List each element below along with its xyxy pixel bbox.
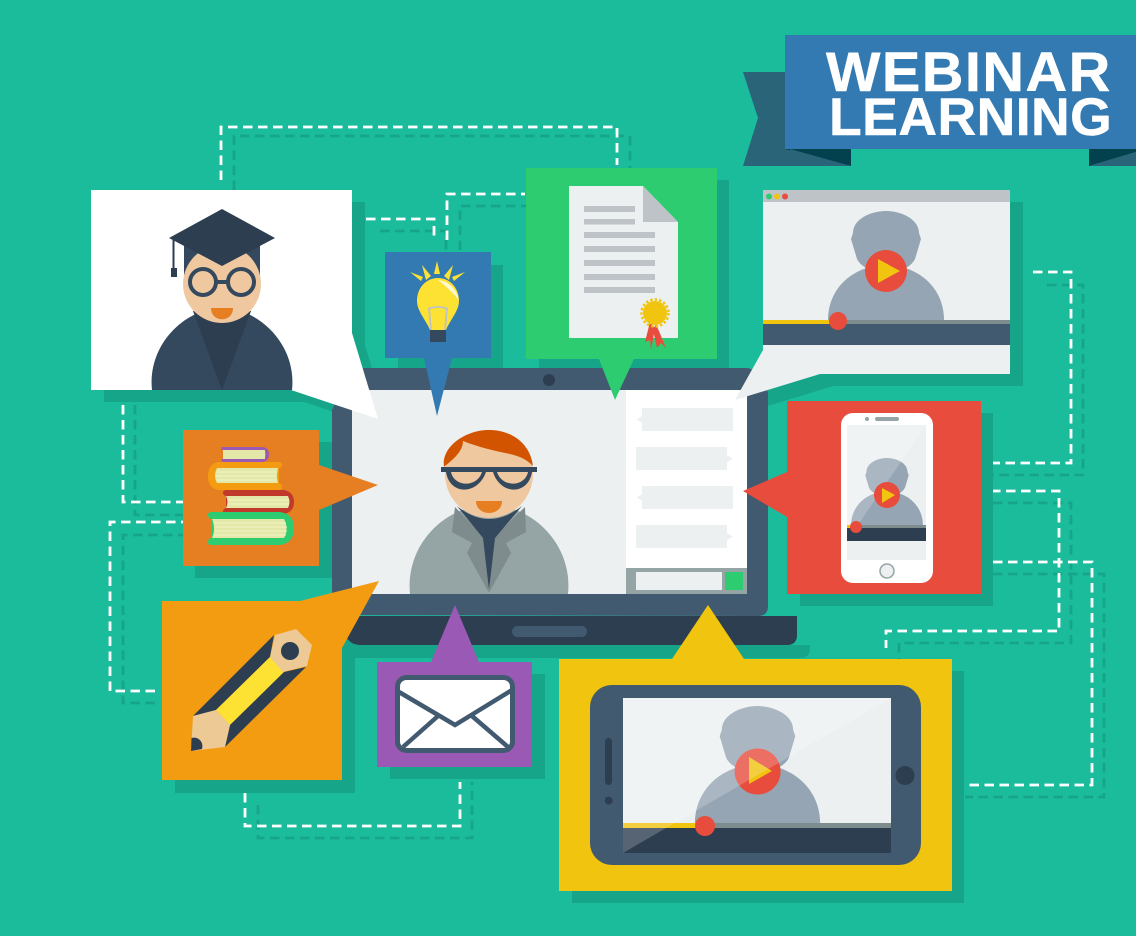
icon: certificate document	[569, 186, 678, 350]
panel: books speech bubble	[183, 430, 378, 566]
icon: graduate	[152, 209, 292, 390]
screen glare	[623, 698, 891, 853]
laptop screen	[352, 390, 747, 594]
panel: idea speech bubble	[385, 252, 491, 416]
presenter silhouette	[695, 706, 820, 824]
title text: LEARNING	[829, 88, 1112, 147]
progress bar	[763, 312, 1010, 345]
dashed connector lines	[110, 127, 1104, 838]
panel: pencil speech bubble	[162, 581, 379, 780]
panel: tablet speech bubble	[559, 605, 952, 891]
progress bar	[623, 823, 891, 853]
title text: WEBINAR	[826, 42, 1110, 104]
play button	[735, 748, 781, 794]
panel: email speech bubble	[377, 605, 532, 767]
title ribbon	[743, 35, 1136, 166]
panel: video window speech bubble	[735, 190, 1010, 400]
panel: smartphone speech bubble	[743, 401, 981, 594]
teacher figure	[410, 430, 568, 594]
icon: pencil	[191, 629, 312, 751]
panel: certificate speech bubble	[526, 168, 717, 400]
title text	[826, 42, 1112, 147]
icon: stack of books	[208, 447, 294, 545]
presenter silhouette	[828, 211, 944, 320]
browser title bar	[763, 190, 1010, 202]
seek handle	[695, 816, 715, 836]
icon: light bulb	[410, 261, 465, 342]
panel: graduate speech bubble	[91, 190, 378, 419]
icon: smartphone	[841, 413, 933, 583]
webcam	[543, 374, 555, 386]
icon: tablet	[590, 685, 921, 865]
icon: envelope	[398, 678, 512, 750]
chat panel	[626, 390, 747, 594]
trackpad	[512, 626, 587, 637]
bubble drop shadows	[104, 180, 1023, 903]
laptop	[332, 368, 797, 645]
play button	[865, 250, 907, 292]
